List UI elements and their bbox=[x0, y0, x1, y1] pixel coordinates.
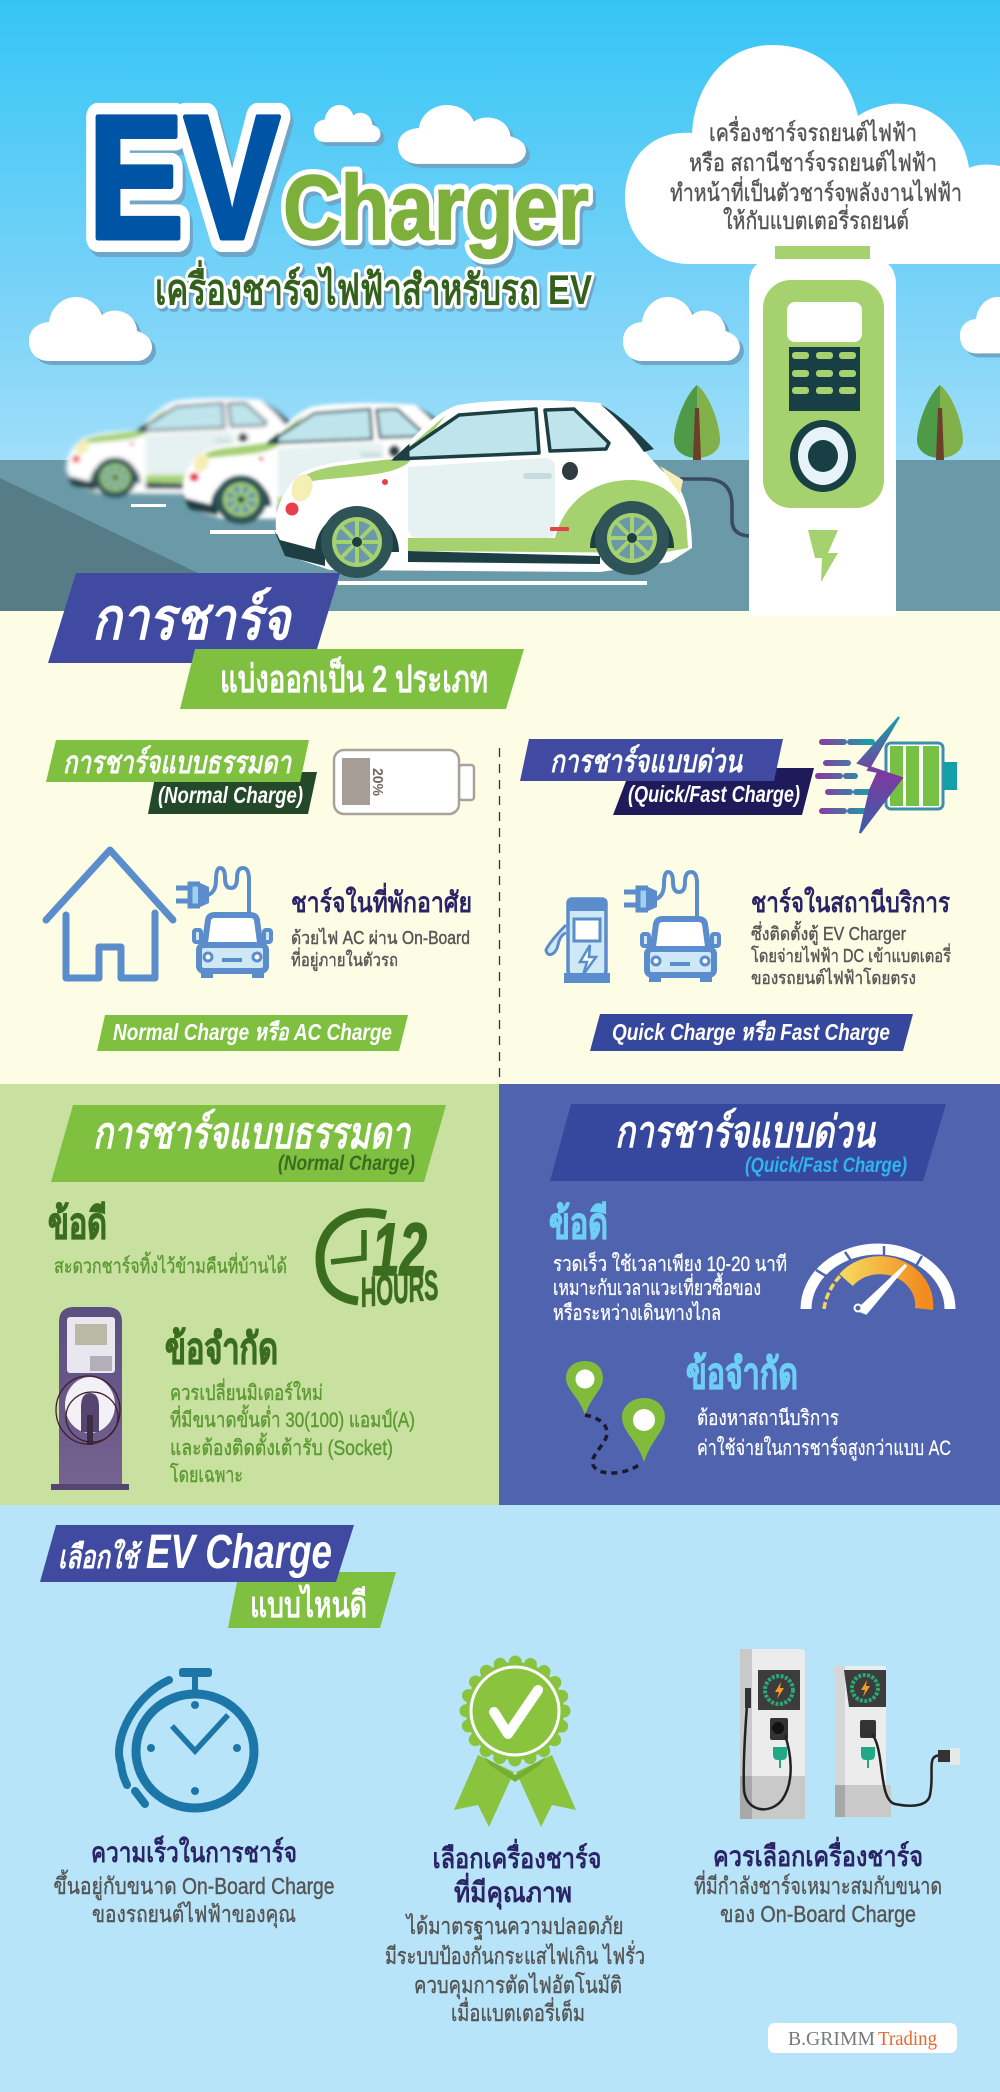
icon: plug and car bbox=[624, 872, 719, 982]
text: home charging bbox=[291, 882, 472, 971]
text: quality charger: มีระบบป้องกันกระแสไฟเกิน ไฟรั่ว bbox=[385, 1940, 645, 1969]
text: suitable power: ควรเลือกเครื่องชาร์จ bbox=[713, 1836, 923, 1872]
banner: quick heading: การชาร์จแบบด่วน bbox=[615, 1107, 876, 1157]
text: quality charger: ที่มีคุณภาพ bbox=[454, 1872, 572, 1910]
text: quality charger: เลือกเครื่องชาร์จ bbox=[432, 1838, 602, 1874]
icon: stopwatch bbox=[119, 1668, 254, 1808]
text: charging speed: ความเร็วในการชาร์จ bbox=[91, 1835, 297, 1868]
title: Charger: Charger bbox=[286, 161, 592, 263]
banner: normal heading: (Normal Charge) bbox=[278, 1152, 415, 1175]
icon: low battery bbox=[334, 750, 474, 814]
subtitle: เครื่องชาร์จไฟฟ้าสำหรับรถ EV bbox=[157, 263, 594, 316]
text: quality charger: ได้มาตรฐานความปลอดภัย bbox=[405, 1913, 624, 1940]
banner: which EV charge: แบบไหนดี bbox=[250, 1583, 367, 1625]
callout: big cloud with definition bbox=[625, 45, 1000, 264]
callout: big cloud with definition: หรือ สถานีชาร์จรถยนต์ไฟฟ้า bbox=[689, 149, 937, 177]
text: pros: ข้อดี bbox=[48, 1200, 107, 1247]
text: home charging: ด้วยไฟ AC ผ่าน On-Board bbox=[291, 927, 470, 948]
text: charging speed: ขึ้นอยู่กับขนาด On-Board Charge bbox=[54, 1870, 334, 1900]
icon: map pins and route bbox=[566, 1361, 665, 1473]
banner: normal charge bbox=[46, 740, 317, 814]
icon: charging post bbox=[546, 899, 610, 983]
station foot over cream bbox=[749, 600, 896, 616]
banner: quick or fast bbox=[590, 1014, 913, 1051]
callout: big cloud with definition: เครื่องชาร์จรถยนต์ไฟฟ้า bbox=[709, 116, 917, 147]
icon: far blurred car bbox=[65, 398, 316, 498]
banner: which EV charge: EV Charge bbox=[146, 1526, 332, 1579]
icon: charging cable bbox=[680, 479, 749, 536]
divider: dashed centre line bbox=[498, 748, 500, 1084]
subtitle: เครื่องชาร์จไฟฟ้าสำหรับรถ EV bbox=[155, 260, 592, 313]
text: charging speed bbox=[54, 1835, 334, 1928]
text: limitations: โดยเฉพาะ bbox=[170, 1463, 243, 1487]
banner: charging heading bbox=[48, 573, 340, 663]
title: EV: EV bbox=[88, 80, 280, 276]
icon: speed gauge bbox=[806, 1246, 950, 1313]
panel: charging types bbox=[0, 611, 1000, 1084]
icon: fast battery bbox=[818, 717, 957, 833]
panel: normal charge pros and cons bbox=[0, 1084, 499, 1505]
text: limitations: และต้องติดตั้งเต้ารับ (Socket) bbox=[170, 1433, 393, 1460]
text: limitations: ต้องหาสถานีบริการ bbox=[697, 1407, 839, 1430]
icon: 12 hours clock: HOURS bbox=[358, 1261, 441, 1316]
banner: quick charge bbox=[520, 739, 814, 815]
text: home charging: ที่อยู่ภายในตัวรถ bbox=[291, 947, 398, 971]
text: suitable power: ของ On-Board Charge bbox=[720, 1901, 916, 1927]
banner: two types: แบ่งออกเป็น 2 ประเภท bbox=[220, 656, 488, 701]
text: charging speed: ของรถยนต์ไฟฟ้าของคุณ bbox=[92, 1901, 296, 1928]
text: quality charger: เมื่อแบตเตอรี่เต็ม bbox=[451, 1997, 585, 2026]
subtitle bbox=[155, 260, 594, 316]
title: EV: EV bbox=[91, 85, 283, 281]
logo: B.GRIMM Trading: Trading bbox=[878, 2028, 937, 2050]
icon: wall charger post bbox=[51, 1307, 129, 1490]
text: limitations bbox=[165, 1325, 415, 1487]
icon: 12 hours clock: 12 bbox=[372, 1208, 427, 1291]
icon: middle blurred car bbox=[181, 403, 482, 524]
panel: choosing a charger bbox=[0, 1505, 1000, 2092]
text: pros: สะดวกชาร์จทิ้งไว้ข้ามคืนที่บ้านได้ bbox=[54, 1252, 287, 1278]
text: limitations: ที่มีขนาดขั้นต่ำ 30(100) แอมป์(A) bbox=[170, 1405, 415, 1432]
text: station charging: โดยจ่ายไฟฟ้า DC เข้าแบตเตอรี่ bbox=[751, 943, 951, 966]
callout: big cloud with definition: ให้กับแบตเตอรี่รถยนต์ bbox=[723, 204, 909, 235]
banner: quick charge: การชาร์จแบบด่วน bbox=[550, 744, 743, 779]
text: pros: หรือระหว่างเดินทางไกล bbox=[553, 1301, 721, 1325]
icon: plug and car bbox=[176, 868, 271, 978]
text: limitations: ข้อจำกัด bbox=[686, 1350, 798, 1397]
banner: which EV charge: เลือกใช้ bbox=[58, 1538, 143, 1575]
text: pros bbox=[48, 1200, 287, 1278]
text: limitations bbox=[686, 1350, 951, 1461]
banner: two types bbox=[180, 649, 524, 709]
text: station charging: ซึ่งติดตั้งตู้ EV Charger bbox=[751, 921, 906, 945]
banner: normal charge: การชาร์จแบบธรรมดา bbox=[63, 745, 292, 780]
banner: charging heading: การชาร์จ bbox=[92, 587, 293, 652]
banner: quick or fast: Quick Charge หรือ Fast Charge bbox=[612, 1019, 890, 1045]
title: EV: EV bbox=[88, 80, 280, 276]
text: pros: ข้อดี bbox=[549, 1200, 608, 1247]
banner: which EV charge bbox=[40, 1525, 396, 1628]
banner: normal charge: (Normal Charge) bbox=[158, 782, 303, 808]
panel: sky and road hero background bbox=[0, 0, 1000, 612]
banner: quick heading bbox=[550, 1104, 946, 1181]
icon: small clouds bbox=[29, 105, 1000, 365]
panel: quick charge pros and cons bbox=[499, 1084, 1000, 1505]
text: station charging: ชาร์จในสถานีบริการ bbox=[751, 886, 950, 918]
text: pros: รวดเร็ว ใช้เวลาเพียง 10-20 นาที bbox=[553, 1250, 787, 1276]
text: station charging: ของรถยนต์ไฟฟ้าโดยตรง bbox=[751, 967, 916, 988]
text: station charging bbox=[751, 886, 951, 988]
banner: quick heading: (Quick/Fast Charge) bbox=[745, 1154, 907, 1177]
banner: normal or AC: Normal Charge หรือ AC Charge bbox=[113, 1019, 392, 1045]
text: limitations: ข้อจำกัด bbox=[165, 1325, 278, 1372]
text: suitable power bbox=[694, 1836, 942, 1927]
icon: house bbox=[46, 850, 173, 978]
text: quality charger: ควบคุมการตัดไฟอัตโนมัติ bbox=[414, 1972, 622, 1999]
icon: quality ribbon badge bbox=[454, 1662, 576, 1827]
icon: main electric car bbox=[274, 400, 692, 578]
text: home charging: ชาร์จในที่พักอาศัย bbox=[291, 882, 472, 918]
icon: charging station bbox=[749, 246, 896, 612]
banner: normal heading: การชาร์จแบบธรรมดา bbox=[93, 1108, 412, 1158]
icon: 12 hours clock bbox=[320, 1208, 441, 1316]
icon: two charging stations bbox=[740, 1649, 960, 1819]
icon: parking lines bbox=[131, 504, 647, 585]
banner: quick charge: (Quick/Fast Charge) bbox=[628, 781, 800, 807]
text: pros: เหมาะกับเวลาแวะเที่ยวซื้อของ bbox=[553, 1273, 761, 1300]
logo: B.GRIMM Trading bbox=[768, 2023, 957, 2053]
text: pros bbox=[549, 1200, 787, 1325]
title: Charger: Charger bbox=[283, 157, 589, 259]
banner: normal or AC bbox=[97, 1015, 408, 1051]
logo: B.GRIMM Trading: B.GRIMM bbox=[788, 2028, 875, 2050]
icon: trees bbox=[674, 385, 963, 460]
icon: low battery: 20% bbox=[369, 768, 386, 796]
title: Charger: Charger bbox=[283, 157, 589, 259]
text: quality charger bbox=[385, 1838, 645, 2026]
text: limitations: ควรเปลี่ยนมิเตอร์ใหม่ bbox=[170, 1378, 323, 1405]
banner: normal heading bbox=[51, 1105, 446, 1182]
subtitle: เครื่องชาร์จไฟฟ้าสำหรับรถ EV bbox=[155, 260, 592, 313]
